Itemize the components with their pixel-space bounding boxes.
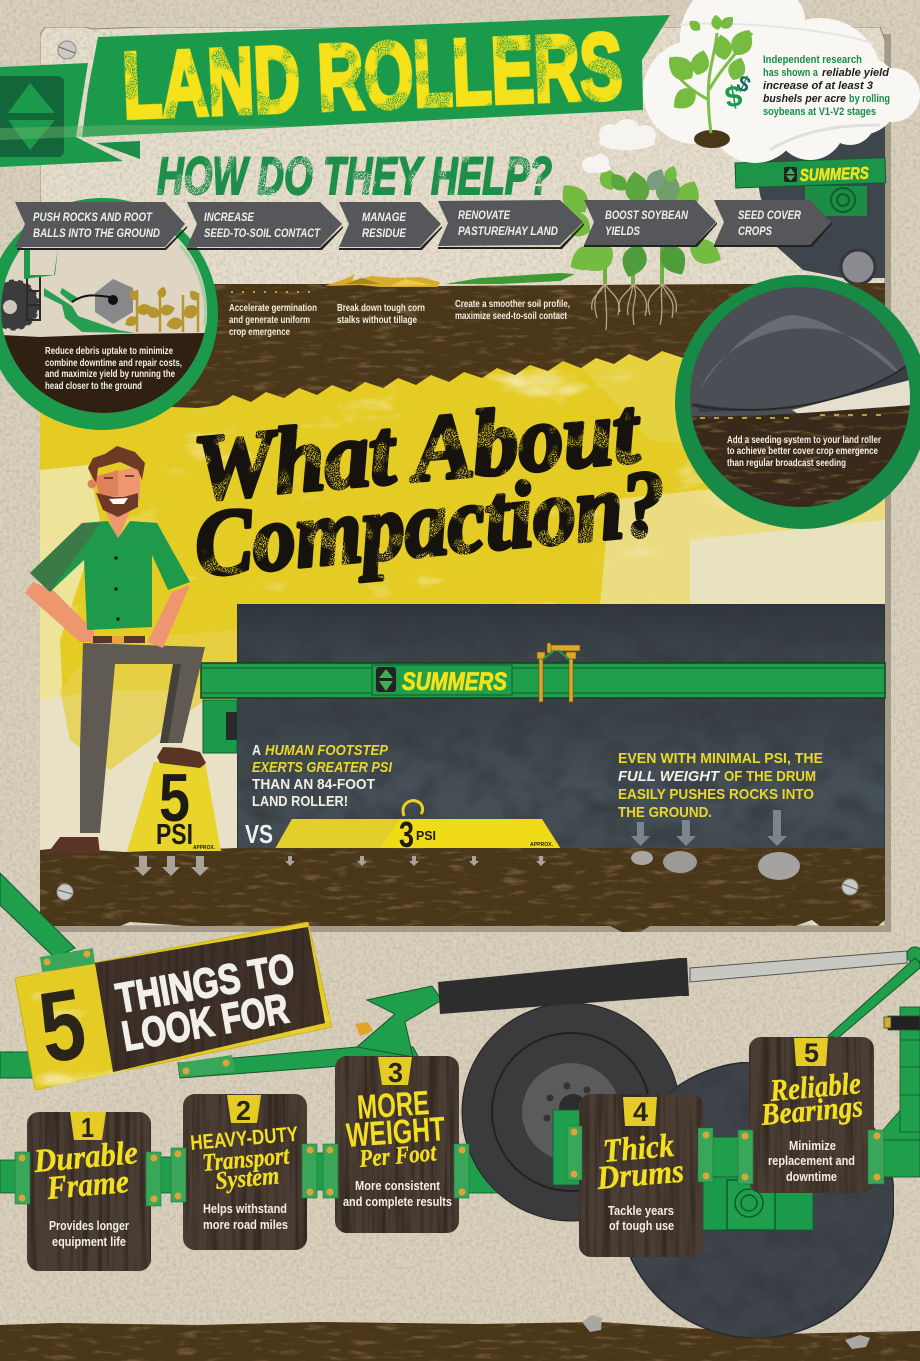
circle caption: to achieve better cover crop emergence [727, 446, 878, 457]
caption: germination: crop emergence [229, 327, 290, 338]
text: human footstep: THAN AN 84-FOOT [252, 776, 375, 793]
heading: how do they help: HOW DO THEY HELP? [157, 147, 552, 206]
arrow: residue [339, 202, 442, 250]
arrow: residue: RESIDUE [362, 226, 407, 240]
panel: yellow compaction background [40, 350, 885, 850]
callout text: has shown a [763, 67, 819, 79]
frame: upper arm [0, 986, 442, 1078]
grass strip [445, 273, 575, 284]
card 1: durable frame: Provides longer [49, 1218, 129, 1233]
callout text: bushels per acre [763, 93, 846, 105]
arrow: cover crops: CROPS [738, 224, 772, 238]
callout text: by rolling [849, 93, 890, 105]
arrow: cover crops: SEED COVER [738, 208, 801, 222]
card 5: reliable bearings: 5 [804, 1038, 819, 1068]
card 5: reliable bearings: Bearings [759, 1088, 864, 1132]
card 3: more weight: 3 [388, 1057, 403, 1088]
sign heading [112, 944, 298, 1060]
sign: five things [15, 922, 332, 1090]
man: shirt [30, 521, 190, 630]
caption: germination: and generate uniform [229, 315, 310, 326]
arrow: soybean yields [584, 200, 717, 247]
text: human footstep: HUMAN FOOTSTEP [265, 742, 389, 759]
card 1: durable frame [27, 1112, 151, 1271]
arrow: soybean yields: BOOST SOYBEAN [605, 208, 688, 222]
card 4: thick drums: Drums [595, 1154, 685, 1197]
machine frame: lower [0, 873, 920, 1338]
card 3: more weight: More consistent [355, 1178, 441, 1193]
banner: title [0, 13, 670, 140]
man: arms [25, 582, 190, 648]
weight: human 5 psi: 5 [159, 760, 190, 836]
card 4: thick drums: 4 [633, 1097, 648, 1127]
weight: roller 3 psi: APPROX. [530, 842, 554, 848]
text: human footstep [252, 742, 393, 810]
text: minimal psi [618, 750, 823, 821]
roller drum wheel: rear [462, 1003, 680, 1221]
icon: bearing [727, 1180, 775, 1230]
card 5: reliable bearings: replacement and [768, 1153, 855, 1168]
heading: what about compaction [190, 378, 670, 597]
soil band: upper [40, 283, 885, 420]
circle caption: combine downtime and repair costs, [45, 358, 182, 369]
straw residue [325, 274, 440, 287]
callout text: soybeans at V1-V2 stages [763, 106, 876, 118]
icon: combine header [0, 248, 135, 333]
arrow: push rocks: BALLS INTO THE GROUND [33, 226, 160, 240]
card 4: thick drums [579, 1094, 703, 1257]
card 2: transport system: 2 [236, 1095, 251, 1126]
circle caption: and maximize yield by running the [45, 369, 175, 380]
card 5: reliable bearings: downtime [786, 1169, 837, 1184]
roller illustration: top right [735, 120, 886, 284]
weight: roller 3 psi [275, 801, 561, 855]
roller frame beam [201, 643, 885, 753]
man: boots [50, 747, 206, 853]
weight: roller 3 psi: 3 [399, 814, 414, 855]
caption: stalks: stalks without tillage [337, 315, 417, 326]
card 2: transport system: more road miles [203, 1217, 288, 1232]
man [25, 446, 206, 853]
card 4: thick drums: Thick [602, 1128, 676, 1170]
roller drum wheel: front [618, 1062, 894, 1338]
icon: soybean plant with dollar signs [662, 13, 758, 148]
circle: cover crops [675, 275, 920, 529]
banner: left ribbon with logo [0, 63, 140, 167]
soybean field plants with roots [555, 164, 726, 330]
weight: human 5 psi: APPROX. [193, 845, 216, 851]
card 1: durable frame: Durable [32, 1135, 139, 1180]
arrow: cover crops [714, 200, 832, 247]
callout text [763, 54, 890, 118]
man: belt [93, 636, 145, 643]
man: head [88, 446, 145, 517]
card 3: more weight: WEIGHT [345, 1110, 446, 1155]
frame: left diagonal [0, 873, 75, 958]
screws [57, 41, 858, 900]
caption: germination: Accelerate germination [229, 303, 317, 314]
text: human footstep: LAND ROLLER! [252, 793, 348, 810]
brand plate: SUMMERS [402, 668, 507, 696]
card 2: transport system [183, 1094, 307, 1250]
clamps joining the cards [15, 1126, 884, 1206]
soil captions [229, 292, 570, 338]
arrow: soybean yields: YIELDS [605, 224, 640, 238]
circle caption: Add a seeding system to your land roller [727, 435, 881, 446]
label: vs: VS [245, 819, 273, 849]
card 5: reliable bearings: Reliable [768, 1065, 862, 1108]
weight: human 5 psi [127, 760, 221, 851]
heading: what about compaction: What About [190, 378, 645, 521]
icon: crop plants [123, 285, 201, 332]
arrows: pressure into the soil [134, 856, 546, 876]
hydraulic cylinder [438, 947, 920, 1014]
caption: soil profile: Create a smoother soil profile, [455, 299, 570, 310]
circle caption [727, 435, 881, 469]
card 2: transport system: Helps withstand [203, 1201, 287, 1216]
card 1: durable frame: equipment life [52, 1234, 126, 1249]
u-bolts [537, 643, 580, 702]
cloud: yield callout [643, 0, 920, 163]
weight: roller 3 psi: PSI [416, 828, 436, 843]
callout text: Independent research [763, 54, 862, 66]
text: minimal psi: EASILY PUSHES ROCKS INTO [618, 786, 814, 803]
text: minimal psi: EVEN WITH MINIMAL PSI, THE [618, 750, 823, 767]
text: human footstep: EXERTS GREATER PSI [252, 759, 393, 776]
card 3: more weight: Per Foot [357, 1139, 438, 1173]
translucent arrows: drum [631, 810, 787, 846]
soil band: lower [40, 848, 885, 932]
circle caption [45, 346, 182, 392]
arrows: benefits row [15, 200, 832, 250]
callout text: increase of at least 3 [763, 80, 873, 92]
arrow: seed-to-soil: SEED-TO-SOIL CONTACT [204, 226, 321, 240]
roller brand name: SUMMERS [799, 164, 870, 185]
sign heading: LOOK FOR [118, 984, 292, 1060]
card 1: durable frame: Frame [45, 1164, 130, 1207]
card 3: more weight: MORE [356, 1084, 430, 1127]
transport bar [0, 1107, 920, 1230]
arrow: renovate: PASTURE/HAY LAND [458, 224, 558, 238]
caption: soil profile: maximize seed-to-soil contact [455, 311, 568, 322]
circle caption: than regular broadcast seeding [727, 458, 846, 469]
bottom rocks [582, 1315, 870, 1349]
caption: stalks: Break down tough corn [337, 303, 425, 314]
caption: stalks [337, 303, 425, 326]
right ladder frame [884, 1007, 920, 1132]
caption: germination [229, 292, 317, 338]
callout text: reliable yield [822, 67, 889, 79]
arrow: push rocks: PUSH ROCKS AND ROOT [33, 210, 153, 224]
panel: main board [40, 27, 891, 932]
heading: what about compaction: Compaction? [190, 451, 670, 597]
man: neck [105, 510, 130, 540]
weight: human 5 psi: PSI [156, 819, 193, 851]
caption: soil profile [455, 299, 570, 322]
icon: soybean plant with dollar signs: $ [733, 70, 755, 98]
circle caption: Reduce debris uptake to minimize [45, 346, 173, 357]
sign heading: THINGS TO [112, 944, 298, 1022]
frame: right diagonal [828, 958, 920, 1038]
sign number: 5 [32, 967, 93, 1085]
text: minimal psi: OF THE DRUM [724, 768, 816, 785]
man: pants [80, 643, 205, 833]
icon: Summers logo [0, 76, 64, 157]
soil inside circle [4, 333, 204, 413]
card 5: reliable bearings [749, 1037, 874, 1193]
transport bar behind rear wheel [459, 1147, 519, 1193]
card 2: transport system: HEAVY-DUTY [189, 1123, 299, 1155]
arrow: residue: MANAGE [362, 210, 407, 224]
card 2: transport system: System [214, 1163, 280, 1195]
panel: roller drum background [237, 604, 885, 849]
card 3: more weight [335, 1056, 459, 1233]
rocks [631, 851, 800, 880]
card 3: more weight: and complete results [343, 1194, 452, 1209]
title: LAND ROLLERS [121, 13, 624, 138]
brand plate [372, 665, 512, 696]
circle caption: head closer to the ground [45, 381, 142, 392]
arrow: seed-to-soil [187, 202, 343, 250]
icon: soybean plant with dollar signs: $ [722, 79, 745, 115]
card 4: thick drums: of tough use [609, 1218, 674, 1233]
card 2: transport system: Transport [201, 1142, 291, 1177]
text: minimal psi: THE GROUND. [618, 804, 712, 821]
card 4: thick drums: Tackle years [608, 1203, 674, 1218]
arrow: push rocks [15, 202, 187, 250]
bottom soil [0, 1322, 920, 1361]
text: human footstep: A [252, 742, 261, 759]
card 5: reliable bearings: Minimize [789, 1138, 836, 1153]
arrow: renovate [438, 200, 584, 249]
arrow: seed-to-soil: INCREASE [204, 210, 255, 224]
card 1: durable frame: 1 [81, 1112, 94, 1143]
circle: push rocks [0, 198, 218, 430]
arrow: renovate: RENOVATE [458, 208, 511, 222]
text: minimal psi: FULL WEIGHT [618, 768, 721, 785]
small clouds [582, 119, 656, 173]
